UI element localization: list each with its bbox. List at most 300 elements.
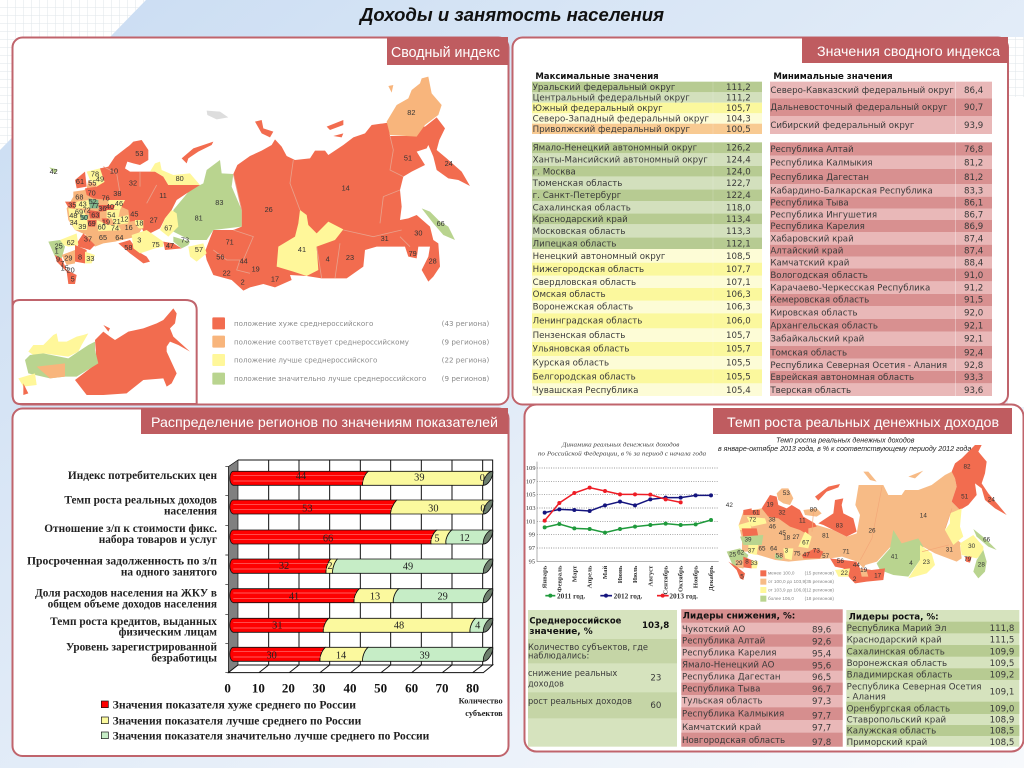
map: real income growth by region: 37 xyxy=(748,547,755,554)
map: summary index by region: 22 xyxy=(223,269,231,278)
table: minimum values: Республика Карелия xyxy=(770,222,865,232)
table: leaders of growth: Владимирская область xyxy=(847,671,952,681)
table: minimum values: Кемеровская область xyxy=(770,296,869,306)
income map legend: от 100,0 до 103,9 xyxy=(768,579,806,584)
table: leaders of decline: 97,3 xyxy=(812,697,831,707)
table: leaders of growth: 109,1 xyxy=(990,687,1014,697)
bar category labels: Доля расходов населения на ЖКУ в xyxy=(35,588,217,600)
map: real income growth by region: 18 xyxy=(783,535,791,542)
map: summary index by region: 32 xyxy=(129,178,137,187)
table: leaders of decline: 95,4 xyxy=(812,649,832,659)
map: summary index by region: 31 xyxy=(381,234,389,243)
bar: real income growth: 30 xyxy=(428,503,438,514)
table: minimum values: 87,4 xyxy=(964,234,984,244)
map: real income growth by region: 27 xyxy=(792,534,800,541)
table: maximum values: Московская область xyxy=(533,227,625,237)
table: summary of income: наблюдались: xyxy=(528,652,589,662)
axis title xyxy=(459,696,503,718)
table: leaders of decline: Ямало-Ненецкий АО xyxy=(682,661,775,671)
map: summary index by region: 26 xyxy=(265,205,273,214)
map: summary index by region: 10 xyxy=(110,166,118,175)
table: maximum values: Центральный федеральный округ xyxy=(533,93,690,103)
map: real income growth by region: 61 xyxy=(752,509,760,516)
map: real income growth by region: 64 xyxy=(770,546,778,553)
table: minimum values: Забайкальский край xyxy=(770,335,864,345)
map legend: положение лучше среднероссийского xyxy=(234,356,378,365)
map: summary index by region: 39 xyxy=(78,222,86,231)
bar: unemployment: 39 xyxy=(419,651,430,662)
map: real income growth by region: 2 xyxy=(853,576,857,583)
map: summary index by region: 66 xyxy=(437,219,445,228)
line chart: income dynamics: 109 xyxy=(526,465,535,472)
map: real income growth by region: 28 xyxy=(978,561,985,568)
map: summary index by region: 20 xyxy=(67,265,75,274)
map legend: (43 региона) xyxy=(442,319,489,328)
panel: summary index map xyxy=(12,37,508,404)
bar: unemployment xyxy=(230,647,493,662)
table: leaders of growth: 111,5 xyxy=(990,635,1014,645)
map: summary index by region: 58 xyxy=(124,243,132,252)
table: maximum values: 105,7 xyxy=(726,345,751,355)
table: leaders of growth: 108,5 xyxy=(990,727,1014,737)
map: real income growth by region: 56 xyxy=(837,558,844,565)
map: real income growth by region: 81 xyxy=(822,532,830,539)
x axis: 10 xyxy=(252,681,265,696)
table: minimum values xyxy=(769,72,992,396)
map: summary index by region: 69 xyxy=(88,219,96,228)
stacked bar chart xyxy=(27,460,503,742)
map: summary index by region: 17 xyxy=(271,274,279,283)
map: summary index by region: 30 xyxy=(414,228,422,237)
map: real income growth by region: 42 xyxy=(726,502,733,509)
map: summary index by region: 72 xyxy=(83,205,91,214)
map: real income growth by region: 38 xyxy=(768,517,776,524)
map: real income growth by region: 53 xyxy=(783,490,790,497)
table: minimum values: 86,7 xyxy=(964,210,983,220)
map: summary index by region: 1 xyxy=(55,246,59,255)
table: leaders of decline: 97,8 xyxy=(812,738,831,748)
map: summary index by region: 54 xyxy=(107,210,115,219)
table: leaders of growth: 109,5 xyxy=(990,659,1014,669)
table: maximum values: Сахалинская область xyxy=(533,203,631,213)
table: leaders of decline: 92,6 xyxy=(812,637,831,647)
table: maximum values: 111,2 xyxy=(726,93,751,103)
table: leaders of decline: Лидеры снижения, %: xyxy=(683,612,795,622)
bar category labels: физическим лицам xyxy=(119,627,217,639)
map: summary index by region: 57 xyxy=(195,245,203,254)
header: summary index: Сводный индекс xyxy=(391,45,500,61)
table: leaders of growth: Краснодарский край xyxy=(847,635,942,645)
x axis: 50 xyxy=(374,681,387,696)
map: real income growth by region: 82 xyxy=(963,463,971,470)
map: summary index by region: 19 xyxy=(102,218,110,227)
table: maximum values: 107,7 xyxy=(726,265,751,275)
bar: overdue wage debt: 2 xyxy=(327,561,333,572)
table: minimum values: Томская область xyxy=(769,349,847,359)
map: summary index by region: 4 xyxy=(326,255,330,264)
map: summary index by region: 65 xyxy=(99,233,107,242)
table: leaders of decline: 97,7 xyxy=(812,724,831,734)
table: leaders of growth: 109,2 xyxy=(990,671,1014,681)
table: leaders of decline: Чукотский АО xyxy=(682,625,746,635)
table: maximum values: 111,2 xyxy=(726,83,751,93)
table: summary of income: значение, % xyxy=(529,627,593,637)
map: real income growth by region: 57 xyxy=(822,553,830,560)
table: summary of income: рост реальных доходов xyxy=(528,697,632,707)
table: maximum values: Белгородская область xyxy=(533,372,636,382)
map: real income growth by region: 46 xyxy=(769,523,776,530)
line chart legend xyxy=(545,591,698,600)
header: distribution of regions xyxy=(141,408,508,434)
income map legend: (18 регионов) xyxy=(805,596,834,601)
bar: consumer prices: 44 xyxy=(296,471,306,482)
table: maximum values xyxy=(532,72,762,396)
map: summary index by region: 50 xyxy=(80,213,88,222)
line chart: income dynamics: Динамика реальных денежных доходов xyxy=(561,441,680,448)
map: real income growth by region: 17 xyxy=(874,573,882,580)
map: summary index by region: 40 xyxy=(106,202,114,211)
table: minimum values: Кировская область xyxy=(770,308,858,318)
bar category labels: населения xyxy=(164,506,217,518)
table: maximum values: 108,5 xyxy=(726,252,751,262)
table: minimum values: 86,4 xyxy=(964,86,984,96)
table: minimum values: 86,1 xyxy=(964,199,983,209)
table: minimum values: Кабардино-Балкарская Республика xyxy=(770,187,933,197)
table: summary of income: 103,8 xyxy=(642,621,669,631)
map legend: положение значительно лучше среднероссийского xyxy=(234,374,427,383)
line chart: income dynamics xyxy=(526,441,719,600)
table: leaders of growth: 109,9 xyxy=(990,647,1014,657)
bar: credit growth: 48 xyxy=(394,621,404,632)
map legend: положение соответствует среднероссийскому xyxy=(234,337,410,346)
axis title: субъектов xyxy=(465,709,503,718)
map: summary index by region: 82 xyxy=(407,108,415,117)
table: maximum values: Курская область xyxy=(533,359,609,369)
table: maximum values: Свердловская область xyxy=(533,278,636,288)
map: summary index by region: 5 xyxy=(71,274,75,283)
line chart: income dynamics: по Российской Федерации, в % за период с начала года xyxy=(538,450,706,457)
map: summary index by region: 62 xyxy=(67,238,75,247)
map: summary index by region: 79 xyxy=(409,249,417,258)
panel: index values xyxy=(512,37,1008,404)
table: leaders of decline: Камчатский край xyxy=(682,723,761,733)
table: maximum values: Тюменская область xyxy=(532,179,622,189)
table: maximum values: 105,7 xyxy=(726,104,751,114)
table: maximum values: Максимальные значения xyxy=(535,72,659,82)
map legend: (9 регионов) xyxy=(442,337,489,346)
table: minimum values: 81,2 xyxy=(964,173,983,183)
map: real income growth by region: 44 xyxy=(853,562,860,569)
table: maximum values: 113,3 xyxy=(726,227,751,237)
bar: wages to fixed basket: 66 xyxy=(323,533,333,544)
bar category labels: Темп роста кредитов, выданных xyxy=(50,616,217,628)
map: real income growth by region: 67 xyxy=(802,539,810,546)
table: minimum values: 81,2 xyxy=(964,159,983,169)
month labels: Апрель xyxy=(587,565,594,588)
bar: credit growth xyxy=(230,618,493,632)
line chart: income dynamics: 101 xyxy=(526,518,535,525)
table: minimum values: 91,5 xyxy=(964,296,983,306)
map: real income growth by region: 79 xyxy=(964,556,972,563)
bar: unemployment: 30 xyxy=(266,651,277,662)
map: real income growth by region: 33 xyxy=(750,560,758,567)
month labels: Июль xyxy=(632,565,639,583)
table: maximum values: Липецкая область xyxy=(533,239,617,249)
bar category labels: общем объеме доходов населения xyxy=(48,599,217,611)
map: summary index by region: 16 xyxy=(125,223,133,232)
income map legend: более 106,0 xyxy=(768,596,794,601)
map: real income growth by region: 58 xyxy=(776,553,783,560)
map legend: положение хуже среднероссийского xyxy=(234,319,374,328)
table: minimum values: Тверская область xyxy=(769,386,851,396)
x axis: 70 xyxy=(436,681,448,696)
map: summary index by region: 74 xyxy=(111,224,119,233)
table: minimum values: Карачаево-Черкесская Республика xyxy=(770,284,930,294)
table: maximum values: 105,7 xyxy=(726,331,751,341)
map: real income growth by region xyxy=(718,435,1007,602)
map: real income growth by region: 19 xyxy=(766,502,774,509)
table: minimum values: 76,8 xyxy=(964,145,983,155)
map: summary index by region: 63 xyxy=(91,210,99,219)
map: summary index by region: 9 xyxy=(56,255,60,264)
map: real income growth by region: 62 xyxy=(737,549,745,556)
map: real income growth by region: 14 xyxy=(920,513,927,520)
bar category labels: на одного занятого xyxy=(121,566,217,578)
map: summary index by region: 8 xyxy=(78,252,82,261)
map: real income growth by region: 51 xyxy=(961,493,969,500)
x axis: 60 xyxy=(405,681,418,696)
table: maximum values: Ленинградская область xyxy=(533,317,642,327)
line chart: income dynamics: 107 xyxy=(526,478,535,485)
table: maximum values: 122,7 xyxy=(726,179,751,189)
table: leaders of decline: Тульская область xyxy=(681,696,763,706)
table: maximum values: Краснодарский край xyxy=(533,215,628,225)
table: minimum values: 93,3 xyxy=(964,373,983,383)
table: minimum values: Камчатский край xyxy=(770,258,849,268)
month labels: Ноябрь xyxy=(693,565,700,588)
bar category labels: Индекс потребительских цен xyxy=(68,470,217,482)
month labels: Июнь xyxy=(617,565,624,583)
bar: housing expenses share: 41 xyxy=(289,592,299,603)
map: real income growth by region: 47 xyxy=(803,552,810,559)
map: summary index by region: 25 xyxy=(55,241,63,250)
map: summary index by region: 61 xyxy=(76,177,84,186)
map: summary index by region: 70 xyxy=(88,189,96,198)
map: real income growth by region: 11 xyxy=(799,517,806,524)
table: maximum values: 105,5 xyxy=(726,359,751,369)
map: summary index by region: 80 xyxy=(176,174,184,183)
table: leaders of growth: 108,5 xyxy=(990,738,1014,748)
inset map: federal districts xyxy=(13,300,197,404)
map: summary index by region: 11 xyxy=(159,191,167,200)
map: summary index by region: 23 xyxy=(346,253,354,262)
map: real income growth by region: Темп роста реальных денежных доходов xyxy=(776,435,915,444)
table: minimum values: Еврейская автономная область xyxy=(770,373,914,383)
map: real income growth by region: 5 xyxy=(740,573,744,580)
table: maximum values: 105,4 xyxy=(726,386,751,396)
map: summary index by region: 38 xyxy=(113,189,121,198)
table: maximum values: Пензенская область xyxy=(533,331,625,341)
x axis: 0 xyxy=(224,681,231,696)
map legend: (22 региона) xyxy=(442,356,489,365)
map legend xyxy=(212,317,489,385)
map: summary index by region: 78 xyxy=(91,170,99,179)
table: leaders of growth: Калужская область xyxy=(847,727,936,737)
map: summary index by region: 51 xyxy=(404,153,412,162)
map: summary index by region: 28 xyxy=(429,256,437,265)
table: leaders of decline: 97,7 xyxy=(812,711,831,721)
table: maximum values: Омская область xyxy=(533,290,606,300)
bar: credit growth: 4 xyxy=(475,621,480,632)
month labels xyxy=(542,565,715,595)
table: minimum values: 88,4 xyxy=(964,258,984,268)
map: summary index by region: 2 xyxy=(241,277,245,286)
map: summary index by region: 42 xyxy=(50,167,58,176)
map: summary index by region: 44 xyxy=(240,257,248,266)
line chart: income dynamics: 95 xyxy=(529,558,535,565)
table: maximum values: Воронежская область xyxy=(533,303,633,313)
map: summary index by region: 29 xyxy=(64,253,72,262)
line chart: income dynamics: 99 xyxy=(529,532,535,539)
table: leaders of decline: 96,5 xyxy=(812,673,831,683)
table: leaders of growth: 111,8 xyxy=(990,624,1014,634)
map: real income growth by region: 31 xyxy=(946,547,953,554)
header: distribution of regions: Распределение регионов по значениям показателей xyxy=(151,414,498,430)
bar: real income growth: 0 xyxy=(480,503,486,514)
map: summary index by region: 55 xyxy=(88,179,96,188)
income map legend: (15 регионов) xyxy=(805,571,834,576)
map: summary index by region: 76 xyxy=(102,193,110,202)
month labels: Декабрь xyxy=(708,565,715,591)
table: leaders of growth: Воронежская область xyxy=(847,659,947,669)
table: minimum values: 91,2 xyxy=(964,284,983,294)
header: real income growth: Темп роста реальных денежных доходов xyxy=(727,414,999,430)
panel: distribution of regions xyxy=(12,408,508,756)
chart legend xyxy=(101,700,430,742)
map: summary index by region xyxy=(48,77,470,291)
map: summary index by region: 27 xyxy=(150,215,158,224)
map: summary index by region: 71 xyxy=(226,237,234,246)
panel: real income growth xyxy=(524,404,1024,752)
table: maximum values: Приволжский федеральный округ xyxy=(533,125,690,135)
bar: overdue wage debt: 49 xyxy=(403,562,413,573)
map: real income growth by region: 39 xyxy=(744,537,752,544)
map: real income growth by region: 29 xyxy=(735,560,743,567)
table: leaders of growth: Республика Северная Осетия xyxy=(847,682,982,692)
chart legend: Значения показателя хуже среднего по России xyxy=(113,700,356,712)
map: summary index by region: 43 xyxy=(79,200,87,209)
bar: overdue wage debt xyxy=(230,559,493,573)
table: minimum values: 91,0 xyxy=(964,271,983,281)
table: leaders of growth: Республика Марий Эл xyxy=(847,624,946,634)
bar category labels: Просроченная задолженность по з/п xyxy=(27,555,217,567)
map: summary index by region: 34 xyxy=(70,218,78,227)
map: real income growth by region: 23 xyxy=(923,559,930,566)
table: maximum values: Чувашская Республика xyxy=(533,386,638,396)
table: minimum values: Северо-Кавказский федеральный округ xyxy=(770,86,954,96)
header: real income growth xyxy=(713,408,1012,434)
month labels: Февраль xyxy=(556,565,563,592)
map: real income growth by region: 71 xyxy=(842,548,850,555)
table: maximum values: Ульяновская область xyxy=(533,345,629,355)
map: summary index by region: 45 xyxy=(130,209,138,218)
bar: housing expenses share xyxy=(230,589,493,603)
table: maximum values: 106,3 xyxy=(726,290,751,300)
income map legend: (35 регионов) xyxy=(805,579,834,584)
table: summary of income: 60 xyxy=(650,701,661,711)
table: maximum values: Ханты-Мансийский автономный округ xyxy=(533,156,708,166)
map: real income growth by region: 32 xyxy=(778,510,786,517)
table: minimum values: 92,8 xyxy=(964,361,983,371)
bar: consumer prices: 0 xyxy=(480,473,485,484)
table: maximum values: г. Санкт-Петербург xyxy=(533,191,622,201)
map: summary index by region: 21 xyxy=(113,217,121,226)
month labels: Январь xyxy=(542,565,549,588)
bar: consumer prices xyxy=(230,471,493,485)
map: summary index by region: 77 xyxy=(91,201,99,210)
x axis: 80 xyxy=(466,681,479,696)
axis title: Количество xyxy=(459,696,503,705)
map: real income growth by region: в январе-октябре 2013 года, в % к соответствующему периоду 2012 года xyxy=(718,444,971,453)
line chart: income dynamics: 103 xyxy=(526,505,535,512)
bar category labels: набора товаров и услуг xyxy=(99,534,217,546)
table: leaders of decline: Республика Калмыкия xyxy=(682,710,784,720)
table: maximum values: Северо-Западный федеральный округ xyxy=(533,114,710,124)
map: summary index by region: 52 xyxy=(89,197,97,206)
map: summary index by region: 67 xyxy=(164,223,172,232)
chart legend: Значения показателя значительно лучше среднего по России xyxy=(113,730,430,742)
table: summary of income: Среднероссийское xyxy=(529,616,621,626)
map: real income growth by region: 25 xyxy=(729,551,737,558)
bar: wages to fixed basket: 5 xyxy=(434,533,440,544)
map: summary index by region: 19 xyxy=(252,265,260,274)
table: summary of income: 23 xyxy=(650,673,661,683)
map: summary index by region: 15 xyxy=(61,264,69,273)
line chart: income dynamics: 97 xyxy=(529,545,535,552)
map: summary index by region: 46 xyxy=(115,199,123,208)
table: summary of income: доходов xyxy=(528,680,564,690)
bar category labels: Отношение з/п к стоимости фикс. xyxy=(44,523,217,535)
map: real income growth by region: 26 xyxy=(868,527,876,534)
bar: credit growth: 31 xyxy=(272,621,282,632)
table: leaders of growth: 109,0 xyxy=(990,704,1014,714)
map: summary index by region: 3 xyxy=(137,235,141,244)
series: 2012 xyxy=(543,493,713,515)
table: leaders of decline: 89,6 xyxy=(812,626,831,636)
table: summary of income xyxy=(528,610,677,747)
table: minimum values: Республика Калмыкия xyxy=(770,159,873,169)
title: Доходы и занятость населения xyxy=(358,5,664,25)
income map legend: менее 100,0 xyxy=(768,571,795,576)
table: minimum values: 92,0 xyxy=(964,308,983,318)
map: real income growth by region: 73 xyxy=(813,547,820,554)
map: summary index by region: 12 xyxy=(120,214,128,223)
table: leaders of decline: 96,7 xyxy=(812,685,831,695)
income map legend: (12 регионов) xyxy=(805,587,834,592)
map: real income growth by region: 45 xyxy=(779,530,786,537)
table: leaders of growth: Ставропольский край xyxy=(847,715,946,725)
table: minimum values: Архангельская область xyxy=(770,321,878,331)
table: maximum values: г. Москва xyxy=(533,167,576,177)
map: summary index by region: 69 xyxy=(75,208,83,217)
bar category labels: безработицы xyxy=(151,652,217,664)
bar: housing expenses share: 13 xyxy=(370,592,380,603)
map: summary index by region: 47 xyxy=(166,241,174,250)
table: leaders of decline: Новгородская область xyxy=(682,736,785,746)
map legend: (9 регионов) xyxy=(442,374,489,383)
table: maximum values: 113,4 xyxy=(726,215,751,225)
map: summary index by region: 7 xyxy=(60,259,64,268)
